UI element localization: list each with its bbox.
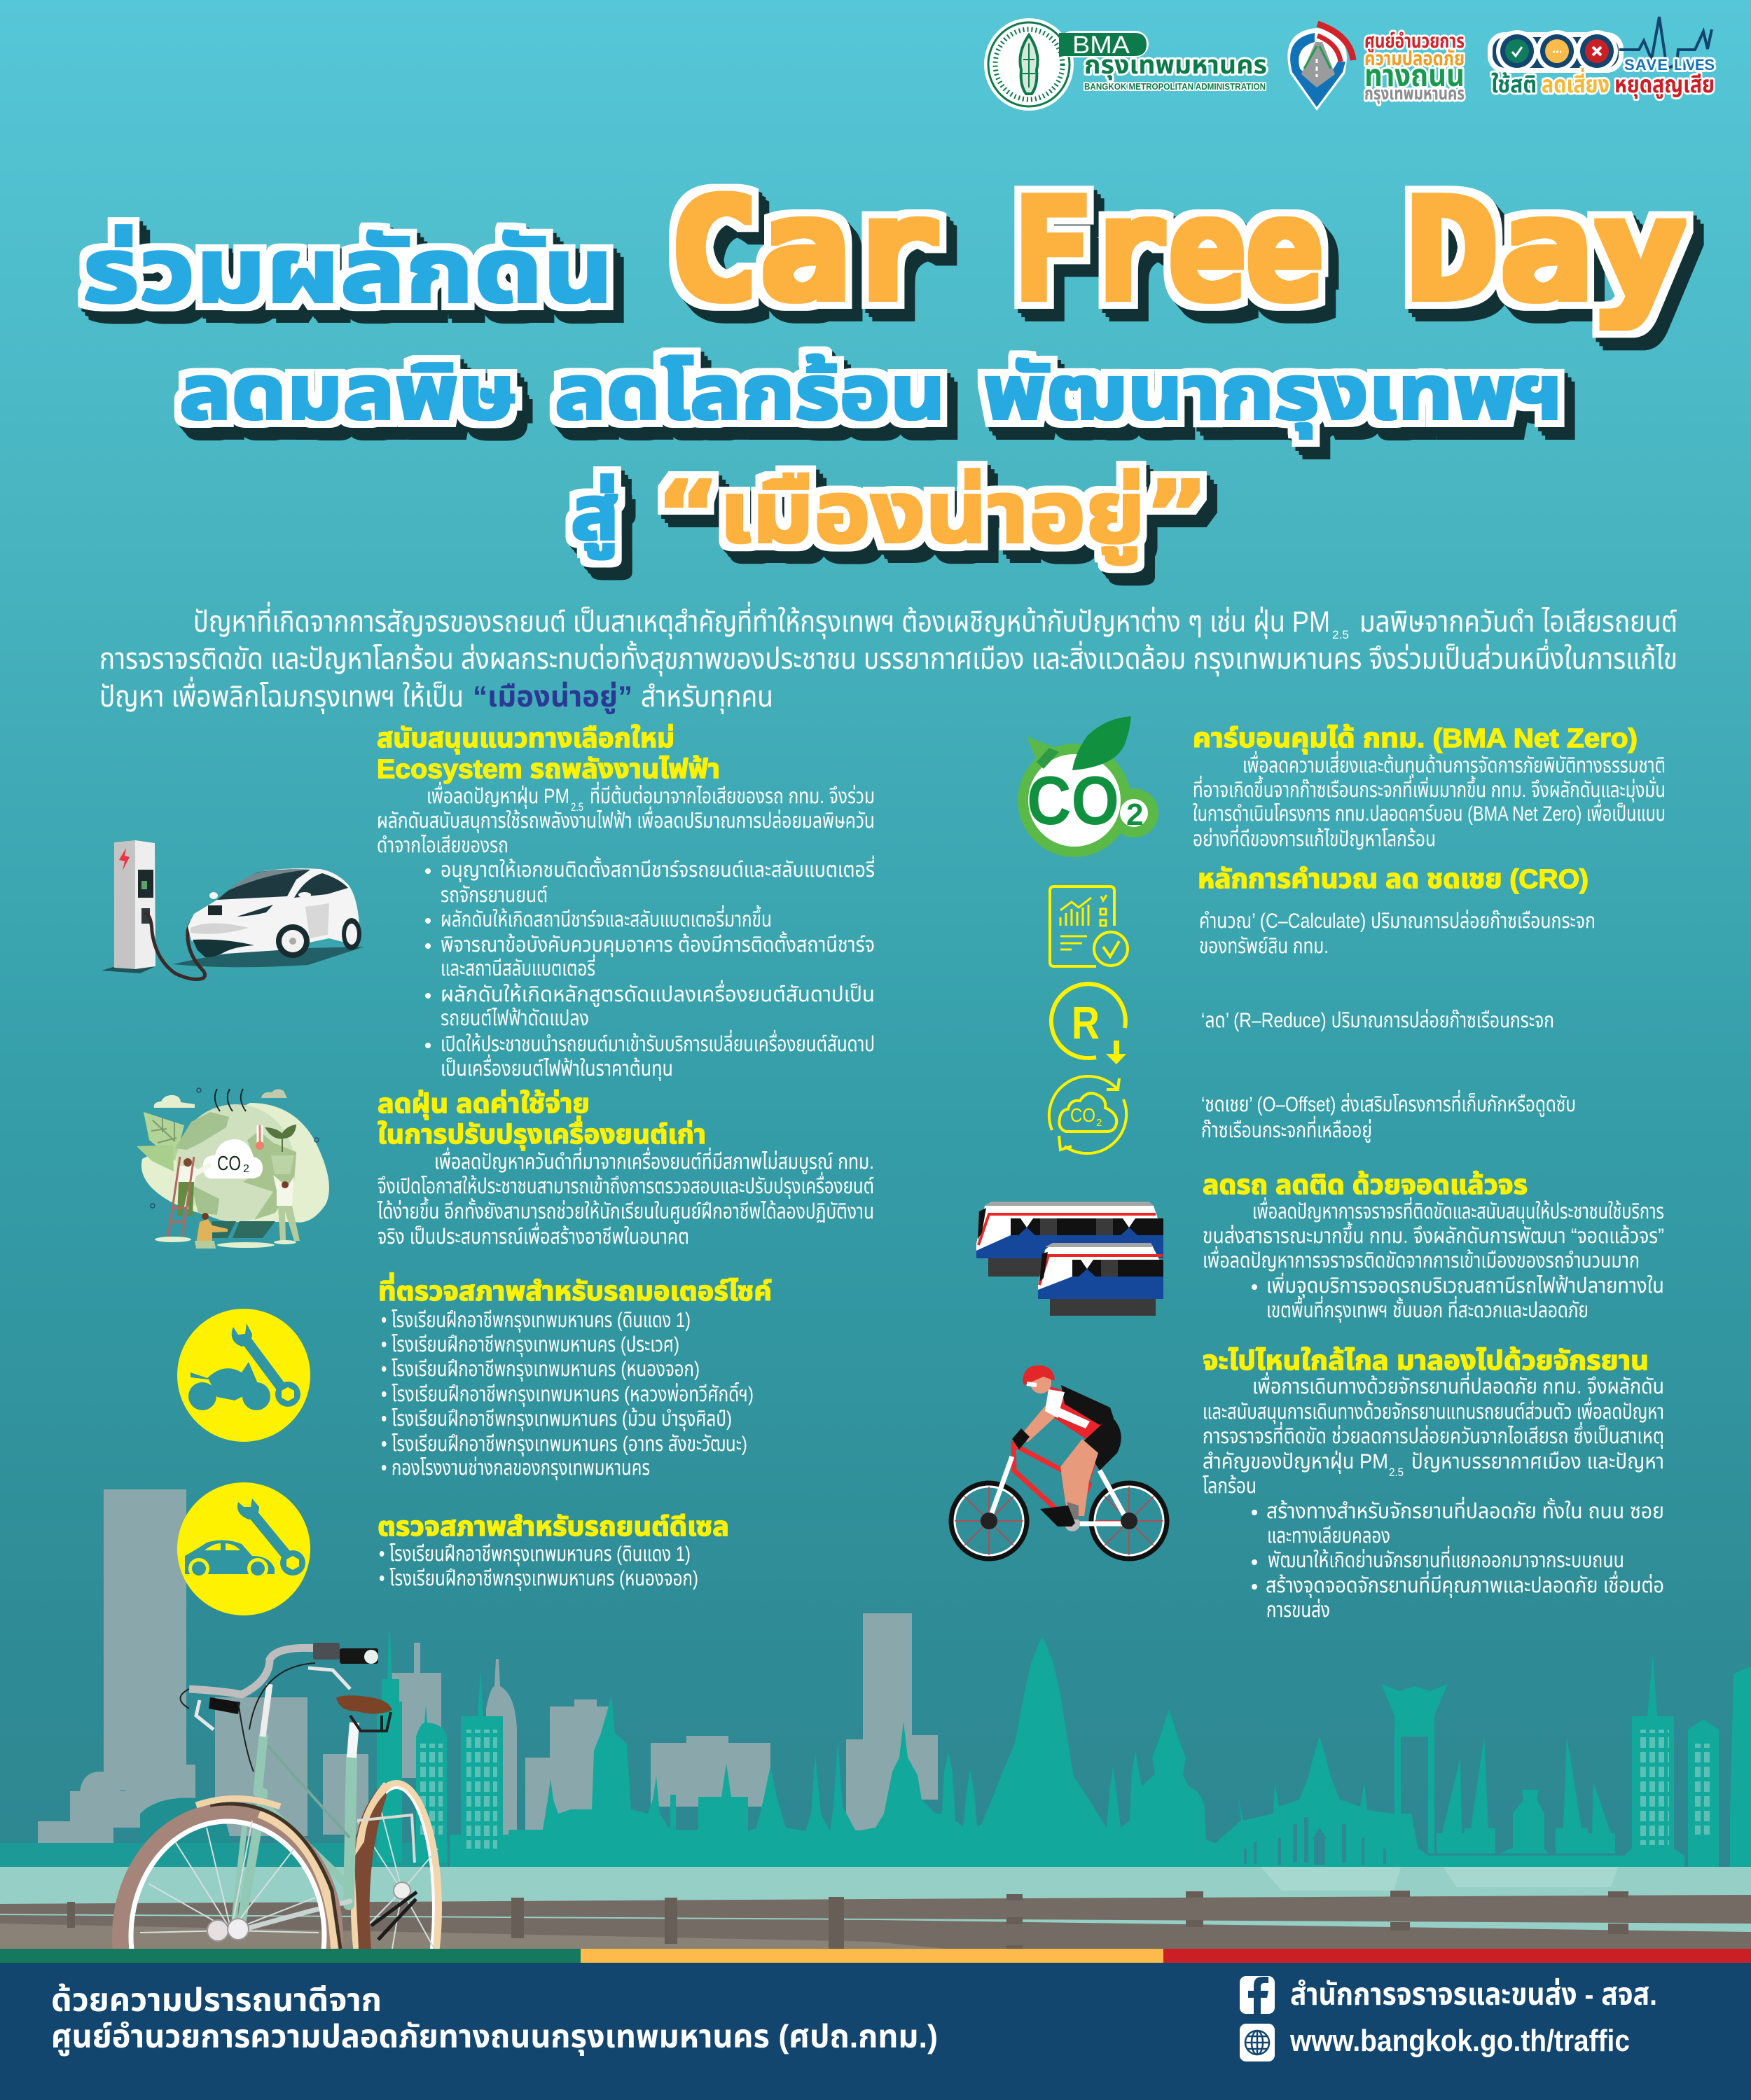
text block: calculate: คำนวณ’ (C–Calculate) ปริมาณการปล่อยก๊าซเรือนกระจก <box>1199 910 1596 933</box>
logo: BMA: BMA <box>1072 32 1130 59</box>
logo: BMA <box>984 18 1267 111</box>
list: diesel inspection sites: • โรงเรียนฝึกอาชีพกรุงเทพมหานคร (หนองจอก) <box>379 1567 698 1591</box>
text block: park and ride description: เพิ่มจุดบริการจอดรถบริเวณสถานีรถไฟฟ้าปลายทางใน <box>1266 1272 1664 1298</box>
icon: reduce R <box>1051 984 1126 1064</box>
logo: save lives: LIVES <box>1674 56 1715 74</box>
frame <box>233 1736 352 1930</box>
panel: CRO principle <box>1049 865 1596 1153</box>
text block: net zero description <box>1193 751 1666 851</box>
panel: park and ride <box>976 1171 1664 1323</box>
saddle <box>336 1695 392 1714</box>
icon: EV charging station and car <box>102 840 364 979</box>
heading: park and ride: ลดรถ ลดติด ด้วยจอดแล้วจร <box>1203 1171 1528 1200</box>
list: cycling measures: สร้างจุดจอดจักรยานที่มีคุณภาพและปลอดภัย เชื่อมต่อ <box>1266 1571 1664 1598</box>
icon: offset CO2 cloud <box>1049 1076 1126 1153</box>
front wheel <box>112 1795 343 1949</box>
list: cycling measures: การขนส่ง <box>1266 1599 1330 1622</box>
logo: save lives <box>1488 17 1715 99</box>
heading: diesel inspection: ตรวจสภาพสำหรับรถยนต์ดีเซล <box>378 1513 729 1542</box>
panel: EV ecosystem <box>102 724 875 1081</box>
title: Thai lines: ลดโลกร้อน <box>555 349 946 437</box>
heading: reduce dust and cost <box>378 1090 706 1150</box>
list: cycling measures <box>1252 1496 1664 1622</box>
list: motorcycle inspection sites: • โรงเรียนฝึกอาชีพกรุงเทพมหานคร (หลวงพ่อทวีศักดิ์ฯ) <box>381 1382 754 1407</box>
title: Car Free Day: Car <box>668 169 942 332</box>
logo: save lives: หยุดสูญเสีย <box>1614 71 1715 99</box>
logo: BMA: กรุงเทพมหานคร <box>1084 50 1267 80</box>
panel: cycling <box>951 1347 1664 1622</box>
footer organisation text: ด้วยความปรารถนาดีจาก <box>51 1982 382 2018</box>
intro paragraph: ปัญหา เพื่อพลิกโฉมกรุงเทพฯ ให้เป็น <box>99 676 464 714</box>
logo: save lives: ใช้สติ <box>1491 71 1537 98</box>
text block: park and ride description: เขตพื้นที่กรุงเทพฯ ชั้นนอก ที่สะดวกและปลอดภัย <box>1266 1295 1589 1323</box>
road and fence <box>0 1891 1751 1949</box>
title: Thai lines: ลดมลพิษ <box>179 349 517 437</box>
heading: motorcycle inspection: ที่ตรวจสภาพสำหรับรถมอเตอร์ไซค์ <box>378 1272 772 1307</box>
text block: EV description: ดำจากไอเสียของรถ <box>377 834 508 857</box>
bullet list: EV measures: และสถานีสลับแบตเตอรี่ <box>441 954 595 980</box>
logo: save lives: ลดเสี่ยง <box>1542 67 1610 98</box>
bullet list: EV measures: เป็นเครื่องยนต์ไฟฟ้าในราคาต้นทุน <box>441 1054 673 1081</box>
text block: park and ride description: เพื่อลดปัญหาการจราจรติดขัดจากการเข้าเมืองของรถจำนวนมาก <box>1203 1246 1640 1272</box>
panel: motorcycle inspection <box>177 1272 772 1480</box>
text block: EV description <box>377 781 875 857</box>
icon: CO2 leaf badge <box>1018 716 1158 857</box>
title: Thai lines: พัฒนากรุงเทพฯ <box>983 349 1563 438</box>
icon: offset CO2 cloud: CO <box>1070 1104 1095 1126</box>
giant swing <box>1381 1684 1448 1854</box>
text block: cycling description: เพื่อการเดินทางด้วยจักรยานที่ปลอดภัย กทม. จึงผลักดัน <box>1252 1372 1664 1398</box>
icon: globe <box>1240 2024 1275 2061</box>
icon: reduce R: R <box>1072 996 1100 1048</box>
color bar <box>0 1949 1751 1963</box>
icon: motorcycle and wrench <box>177 1309 310 1442</box>
heading: EV ecosystem: สนับสนุนแนวทางเลือกใหม่ <box>377 724 674 754</box>
skyline: tower windows <box>420 1730 1713 1849</box>
heading: EV ecosystem <box>377 724 720 784</box>
handlebars <box>181 1643 378 1772</box>
footer organisation text: ศูนย์อำนวยการความปลอดภัยทางถนนกรุงเทพมหานคร (ศปถ.กทม.) <box>51 2018 938 2056</box>
text block: reduce: ‘ลด’ (R–Reduce) ปริมาณการปล่อยก๊าซเรือนกระจก <box>1201 1009 1554 1032</box>
title: Car Free Day <box>668 169 1687 332</box>
bullet list: EV measures: อนุญาตให้เอกชนติดตั้งสถานีชาร์จรถยนต์และสลับแบตเตอรี่ <box>441 855 875 882</box>
temple details <box>1244 1817 1386 1865</box>
text block: park and ride description <box>1203 1197 1664 1323</box>
heading: BMA net zero: คาร์บอนคุมได้ กทม. (BMA Net Zero) <box>1193 724 1638 754</box>
text block: engine description <box>377 1147 874 1249</box>
list: motorcycle inspection sites: • โรงเรียนฝึกอาชีพกรุงเทพมหานคร (ดินแดง 1) <box>381 1309 691 1333</box>
bullet list: EV measures: รถจักรยานยนต์ <box>441 884 548 907</box>
list: motorcycle inspection sites <box>381 1309 754 1480</box>
icon: report <box>1050 886 1128 966</box>
title: Thai lines: ร่วมผลักดัน <box>83 219 614 324</box>
text block: engine description: เพื่อลดปัญหาควันดำที่มาจากเครื่องยนต์ที่มีสภาพไม่สมบูรณ์ กทม. <box>434 1147 874 1174</box>
icon: earth CO2 illustration: 2 <box>243 1163 249 1175</box>
icon: earth CO2 illustration: CO <box>217 1153 241 1175</box>
logo: road safety centre: ความปลอดภัย <box>1364 48 1465 69</box>
heading: reduce dust and cost: ในการปรับปรุงเครื่องยนต์เก่า <box>378 1115 706 1150</box>
water <box>0 1867 1751 1937</box>
icon: CO2 leaf badge: 2 <box>1126 798 1143 832</box>
list: diesel inspection sites: • โรงเรียนฝึกอาชีพกรุงเทพมหานคร (ดินแดง 1) <box>379 1543 691 1566</box>
icon: vintage bicycle <box>112 1643 442 1949</box>
list: motorcycle inspection sites: • โรงเรียนฝึกอาชีพกรุงเทพมหานคร (ประเวศ) <box>381 1333 679 1357</box>
icon: facebook <box>1240 1976 1275 2014</box>
list: cycling measures: พัฒนาให้เกิดย่านจักรยานที่แยกออกมาจากระบบถนน <box>1268 1545 1624 1572</box>
facebook page name: สำนักการจราจรและขนส่ง - สจส. <box>1290 1977 1657 2012</box>
title: Car Free Day: Day <box>1405 169 1687 332</box>
icon: CO2 leaf badge: CO <box>1027 762 1119 839</box>
logo: road safety centre: ทางถนน <box>1364 59 1465 93</box>
text block: EV description: ที่มีต้นต่อมาจากไอเสียของรถ กทม. จึงร่วม <box>590 781 875 808</box>
text block: engine description: ได้ง่ายขึ้น อีกทั้งยังสามารถช่วยให้นักเรียนในศูนย์ฝึกอาชีพได้ลองปฏิบัติงาน <box>377 1197 874 1224</box>
bullet list: EV measures: เปิดให้ประชาชนนำรถยนต์มาเข้ารับบริการเปลี่ยนเครื่องยนต์สันดาป <box>441 1029 875 1056</box>
list: cycling measures: สร้างทางสำหรับจักรยานที่ปลอดภัย ทั้งใน ถนน ซอย <box>1266 1496 1664 1523</box>
logo: road safety centre <box>1287 24 1465 111</box>
icon: skytrains <box>976 1202 1163 1316</box>
heading: cycling: จะไปไหนใกล้ไกล มาลองไปด้วยจักรยาน <box>1203 1347 1649 1376</box>
skyline: teal landmarks <box>0 1632 1751 1871</box>
heading: EV ecosystem: Ecosystem รถพลังงานไฟฟ้า <box>377 755 720 784</box>
heading: CRO: หลักการคำนวณ ลด ชดเชย (CRO) <box>1198 865 1589 894</box>
intro paragraph: มลพิษจากควันดำ ไอเสียรถยนต์ <box>1359 605 1677 638</box>
text block: engine description: จริง เป็นประสบการณ์เพื่อสร้างอาชีพในอนาคต <box>378 1222 689 1249</box>
text block: offset: ก๊าซเรือนกระจกที่เหลืออยู่ <box>1201 1115 1372 1143</box>
democracy monument <box>1437 1736 1615 1854</box>
panel: old engine upgrade <box>137 1088 874 1249</box>
panel: diesel inspection <box>177 1482 729 1615</box>
text block: EV description: 2.5 <box>571 800 583 814</box>
post and stem <box>352 1723 354 1758</box>
title: Thai lines <box>83 219 1563 565</box>
list: cycling measures: และทางเลียบคลอง <box>1267 1524 1390 1548</box>
logo: road safety centre: กรุงเทพมหานคร <box>1364 83 1465 104</box>
text block: cycling description: ปัญหาบรรยากาศเมือง และปัญหา <box>1411 1450 1664 1473</box>
rear wheel <box>351 1780 442 1949</box>
text block: offset <box>1201 1090 1576 1143</box>
intro paragraph: ปัญหาที่เกิดจากการสัญจรของรถยนต์ เป็นสาเหตุสำคัญที่ทำให้กรุงเทพฯ ต้องเผชิญหน้ากับปัญหาต่าง ๆ เช่น ฝุ่น PM <box>193 602 1330 639</box>
intro paragraph: 2.5 <box>1332 628 1349 641</box>
logo: save lives: SAVE <box>1624 56 1668 74</box>
panel: BMA net zero <box>1018 716 1666 857</box>
text block: engine description: จึงเปิดโอกาสให้ประชาชนสามารถเข้าถึงการตรวจสอบและปรับปรุงเครื่องยนต์ <box>378 1171 874 1199</box>
intro paragraph: สำหรับทุกคน <box>641 680 773 714</box>
title: Thai lines: “เมืองน่าอยู่” <box>656 463 1208 565</box>
icon: car and wrench <box>177 1482 310 1615</box>
bullet list: EV measures: ผลักดันให้เกิดหลักสูตรดัดแปลงเครื่องยนต์สันดาปเป็น <box>441 980 875 1007</box>
text block: calculate: ของทรัพย์สิน กทม. <box>1199 935 1329 958</box>
text block: EV description: เพื่อลดปัญหาฝุ่น PM <box>427 781 569 809</box>
text block: net zero description: อย่างที่ดีของการแก้ไขปัญหาโลกร้อน <box>1193 824 1436 851</box>
footer panel <box>0 1963 1751 2100</box>
icon: offset CO2 cloud: 2 <box>1096 1117 1102 1129</box>
bullet list: EV measures: รถยนต์ไฟฟ้าดัดแปลง <box>441 1007 589 1030</box>
text block: cycling description <box>1203 1372 1664 1498</box>
text block: calculate <box>1199 910 1596 958</box>
bullet list: EV measures: พิจารณาข้อบังคับควบคุมอาคาร ต้องมีการติดตั้งสถานีชาร์จ <box>441 931 875 957</box>
footer organisation text <box>51 1982 938 2056</box>
list: motorcycle inspection sites: • กองโรงงานช่างกลของกรุงเทพมหานคร <box>381 1456 650 1480</box>
text block: cycling description: 2.5 <box>1389 1466 1404 1479</box>
text block: offset: ‘ชดเชย’ (O–Offset) ส่งเสริมโครงการที่เก็บกักหรือดูดซับ <box>1201 1090 1576 1117</box>
text block: cycling description: การจราจรที่ติดขัด ช่วยลดการปล่อยควันจากไอเสียรถ ซึ่งเป็นสาเหตุ <box>1203 1421 1664 1449</box>
heading: reduce dust and cost: ลดฝุ่น ลดค่าใช้จ่าย <box>378 1090 590 1120</box>
text block: park and ride description: ขนส่งสาธารณะมากขึ้น กทม. จึงผลักดันการพัฒนา “จอดแล้วจร” <box>1203 1221 1664 1248</box>
text block: EV description: ผลักดันสนับสนุการใช้รถพลังงานไฟฟ้า เพื่อลดปริมาณการปล่อยมลพิษควัน <box>377 806 875 833</box>
intro paragraph: “เมืองน่าอยู่” <box>473 680 632 714</box>
logo: road safety centre: ศูนย์อำนวยการ <box>1364 30 1465 53</box>
intro paragraph <box>99 602 1677 714</box>
text block: cycling description: สำคัญของปัญหาฝุ่น PM <box>1203 1450 1388 1474</box>
title: Car Free Day: Free <box>1013 169 1323 332</box>
title: Thai lines: สู่ <box>571 470 619 559</box>
title <box>83 169 1687 565</box>
icon: cyclist <box>951 1365 1167 1559</box>
text block: cycling description: โลกร้อน <box>1203 1475 1257 1498</box>
list: motorcycle inspection sites: • โรงเรียนฝึกอาชีพกรุงเทพมหานคร (หนองจอก) <box>381 1358 700 1382</box>
skyline: grey buildings <box>38 1489 938 1843</box>
website: www.bangkok.go.th/traffic <box>1289 2024 1630 2058</box>
list: diesel inspection sites <box>379 1543 698 1591</box>
icon: earth CO2 illustration <box>137 1088 329 1249</box>
list: motorcycle inspection sites: • โรงเรียนฝึกอาชีพกรุงเทพมหานคร (ม้วน บำรุงศิลป์) <box>381 1407 732 1431</box>
bullet list: EV measures <box>425 855 875 1081</box>
bullet list: EV measures: ผลักดันให้เกิดสถานีชาร์จและสลับแบตเตอรี่มากขึ้น <box>441 905 772 931</box>
list: motorcycle inspection sites: • โรงเรียนฝึกอาชีพกรุงเทพมหานคร (อาทร สังขะวัฒนะ) <box>381 1433 747 1456</box>
logo: BMA: BANGKOK METROPOLITAN ADMINISTRATION <box>1084 81 1266 92</box>
